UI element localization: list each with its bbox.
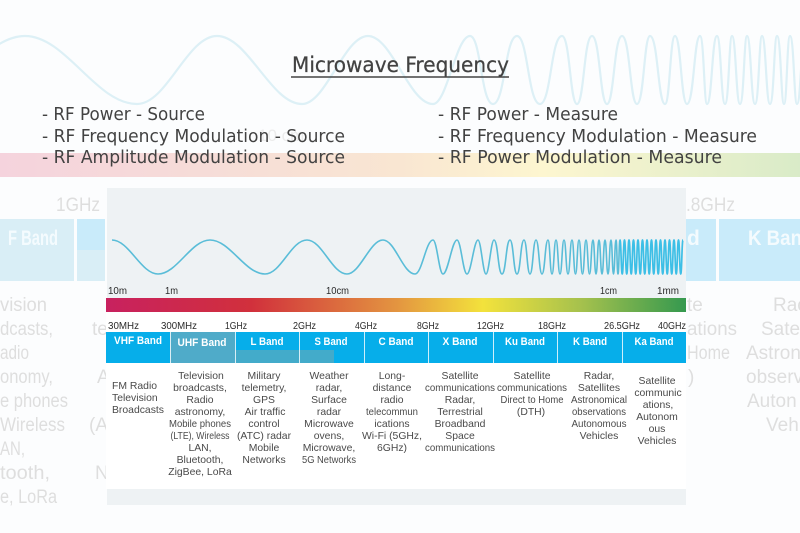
wavelength labels: 10m [108,286,127,297]
C band applications: 6GHz) [377,443,407,454]
band header bar: Ku Band [505,336,545,348]
faded background band boxes and text: Wireless [0,415,65,436]
faded background band boxes and text: e, LoRa [0,487,57,508]
faded background band boxes and text: AN, [0,439,25,460]
wavelength labels: 1mm [657,286,679,297]
UHF applications: astronomy, [175,407,225,418]
band header bar [106,332,686,363]
K band applications: Satellites [578,383,620,394]
band header bar: X Band [442,336,478,348]
Ka band applications: ous [649,424,665,435]
VHF applications: FM Radio [112,381,157,392]
frequency labels: 300MHz [161,321,197,332]
VHF applications: Television [112,393,158,404]
K band applications: Autonomous [572,419,626,430]
K band applications: Vehicles [580,431,618,442]
faded background band boxes and text: Home [687,343,730,364]
panel: spectrum chart [106,188,686,505]
frequency labels: 1GHz [225,321,247,332]
VHF applications [112,381,164,416]
L band applications: Mobile [249,443,280,454]
C band applications [362,371,422,454]
faded background band boxes and text: Astron [746,343,800,364]
C band applications: radio [380,395,404,406]
source list: - RF Frequency Modulation - Source [42,127,345,147]
source list: - RF Amplitude Modulation - Source [42,148,345,168]
frequency labels: 26.5GHz [604,321,640,332]
faded background band boxes and text: ations [687,319,737,340]
faded background band boxes and text: A [97,367,110,388]
X band applications: Satellite [442,371,479,382]
UHF applications: ZigBee, LoRa [168,467,232,478]
wavelength labels [108,286,679,297]
C band applications: Long- [379,371,405,382]
Ku band applications: Satellite [514,371,551,382]
S band applications: Weather [309,371,349,382]
UHF applications: broadcasts, [173,383,227,394]
measure list: - RF Power - Measure [438,105,618,125]
measure list: - RF Power Modulation - Measure [438,148,722,168]
frequency labels: 8GHz [417,321,439,332]
UHF applications: Mobile phones [169,419,231,430]
X band applications: Radar, [445,395,475,406]
Ka band applications: Satellite [639,376,676,387]
faded background band boxes and text: vision [0,295,47,316]
source list: - RF Power - Source [42,105,205,125]
L band applications: telemetry, [242,383,286,394]
Ku band applications [497,371,567,418]
X band applications [425,371,495,454]
K band applications: observations [572,407,626,418]
L band applications: (ATC) radar [237,431,292,442]
measure list [438,105,757,168]
faded background band boxes and text: 1GHz [56,195,100,216]
faded background ghost label: 10 cm [258,126,304,145]
frequency labels: 18GHz [538,321,566,332]
source list [42,105,345,168]
S band applications: Microwave [304,419,354,430]
wavelength labels: 10cm [326,286,349,297]
faded background band boxes and text: (A [89,415,108,436]
Ka band applications: Vehicles [638,436,676,447]
wavelength labels: 1m [165,286,178,297]
VHF applications: Broadcasts [112,405,164,416]
Ka band applications: Autonom [636,412,678,423]
X band applications: Space [445,431,475,442]
S band applications: radar, [316,383,342,394]
band header bar: C Band [378,336,414,348]
frequency labels: 40GHz [658,321,686,332]
L band applications: GPS [253,395,275,406]
X band applications: Broadband [435,419,486,430]
S band applications: radar [317,407,342,418]
band header bar: K Band [573,336,607,348]
K band applications: Radar, [584,371,614,382]
X band applications: communications [425,443,495,454]
faded background band boxes and text: onomy, [0,367,53,388]
faded background wave [0,36,800,104]
band header bar: VHF Band [114,335,162,347]
UHF applications [168,371,232,478]
C band applications: Wi-Fi (5GHz, [362,431,422,442]
band header bar: S Band [314,336,348,348]
L band applications [237,371,292,466]
UHF applications: Bluetooth, [177,455,223,466]
faded background band boxes and text: tooth, [0,463,50,484]
band header bar: Ka Band [634,336,674,348]
faded background band boxes and text: d [687,227,700,250]
faded background band boxes and text: e phones [0,391,68,412]
Ku band applications: communications [497,383,567,394]
faded background band boxes and text: Auton [747,391,797,412]
S band applications: 5G Networks [302,455,356,466]
X band applications: Terrestrial [437,407,483,418]
UHF applications: Television [178,371,224,382]
band header bar: L Band [250,336,284,348]
faded background band boxes and text [0,195,800,508]
Ka band applications: ations, [643,400,673,411]
frequency labels: 2GHz [293,321,316,332]
faded background band boxes and text: te [687,295,703,316]
wavelength labels: 1cm [600,286,617,297]
UHF applications: LAN, [188,443,212,454]
L band applications: Networks [242,455,286,466]
UHF applications: Radio [186,395,214,406]
Ka band applications [634,376,682,447]
K band applications [571,371,627,442]
C band applications: ications [374,419,410,430]
S band applications: Surface [311,395,347,406]
frequency labels: 12GHz [477,321,504,332]
frequency labels: 4GHz [355,321,377,332]
faded background spectrum band [0,153,800,177]
C band applications: distance [373,383,412,394]
title: Microwave Frequency [292,53,509,78]
UHF applications: (LTE), Wireless [170,431,230,442]
L band applications: Air traffic [245,407,285,418]
L band applications: control [248,419,280,430]
faded background band boxes and text: .8GHz [686,195,735,216]
S band applications: ovens, [314,431,344,442]
faded background band boxes and text: N [95,463,109,484]
measure list: - RF Frequency Modulation - Measure [438,127,757,147]
spectrum gradient bar [106,298,686,312]
faded background band boxes and text: adio [0,343,29,364]
S band applications: Microwave, [303,443,355,454]
L band applications: Military [248,371,281,382]
Ku band applications: (DTH) [517,407,545,418]
Ka band applications: communic [634,388,682,399]
C band applications: telecommun [366,407,418,418]
frequency labels: 30MHz [108,321,139,332]
K band applications: Astronomical [571,395,627,406]
faded background band boxes and text: ) [688,367,694,388]
band header bar: UHF Band [178,337,226,349]
faded background band boxes and text: te [92,319,108,340]
faded background band boxes and text: dcasts, [0,319,53,340]
Ku band applications: Direct to Home [500,395,564,406]
frequency labels [108,321,686,332]
S band applications [302,371,356,466]
X band applications: communications [425,383,495,394]
wave chart [112,240,683,274]
faded background band boxes and text: F Band [8,227,58,250]
